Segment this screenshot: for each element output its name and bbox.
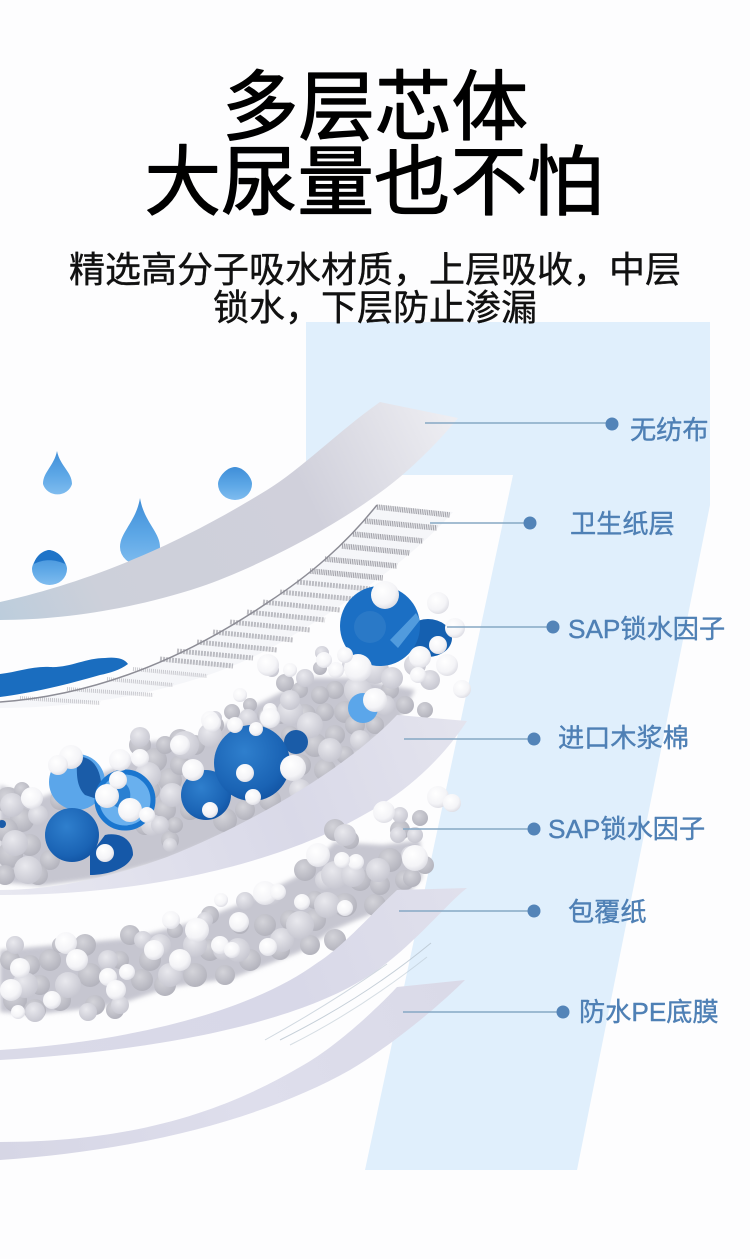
layer labels: SAP锁水因子: [568, 614, 725, 644]
bead mass backdrop: [0, 678, 415, 886]
layer labels: SAP锁水因子: [548, 814, 705, 844]
callout lines with dots: [399, 418, 618, 1018]
layer: imported fluff pulp sheet: [0, 715, 467, 895]
subtitle text: 精选高分子吸水材质，上层吸收，中层: [69, 249, 681, 290]
white beads: SAP layer one: [21, 581, 471, 862]
SAP particles layer two: [0, 786, 461, 1022]
layer labels: [548, 415, 725, 1027]
grey beads: SAP layer two: [0, 810, 434, 1021]
grey beads: SAP layer one: [0, 661, 433, 885]
title: [144, 66, 604, 226]
layer: tissue paper with hatching: [0, 505, 453, 708]
layer: wrapping paper: [0, 888, 467, 1060]
big blue SAP ball: [214, 586, 452, 801]
bead mass backdrop: [0, 840, 422, 1015]
light beads: SAP layer two: [6, 807, 423, 1022]
title: 多层芯体: [222, 66, 528, 151]
SAP particles layer one: [0, 581, 471, 886]
subtitle text: [69, 249, 681, 328]
subtitle text: 锁水，下层防止渗漏: [213, 287, 537, 328]
title: 大尿量也不怕: [144, 141, 604, 226]
white beads: SAP layer two: [0, 786, 461, 1019]
layer labels: 包覆纸: [568, 897, 647, 927]
blue SAP balls: lower left group: [0, 754, 231, 875]
layer labels: 进口木浆棉: [558, 723, 689, 753]
blue water stain: [0, 658, 128, 697]
light beads: SAP layer one: [0, 646, 440, 884]
layer: non-woven top sheet: [0, 402, 458, 620]
layer labels: 无纺布: [630, 415, 709, 445]
layer labels: 卫生纸层: [570, 509, 675, 539]
icon: water drops: [32, 451, 252, 585]
fine fibre lines: [265, 943, 431, 1045]
layer: waterproof PE film: [0, 980, 465, 1160]
background panel: light blue 7 shape: [306, 322, 710, 1170]
layer labels: 防水PE底膜: [579, 997, 719, 1027]
